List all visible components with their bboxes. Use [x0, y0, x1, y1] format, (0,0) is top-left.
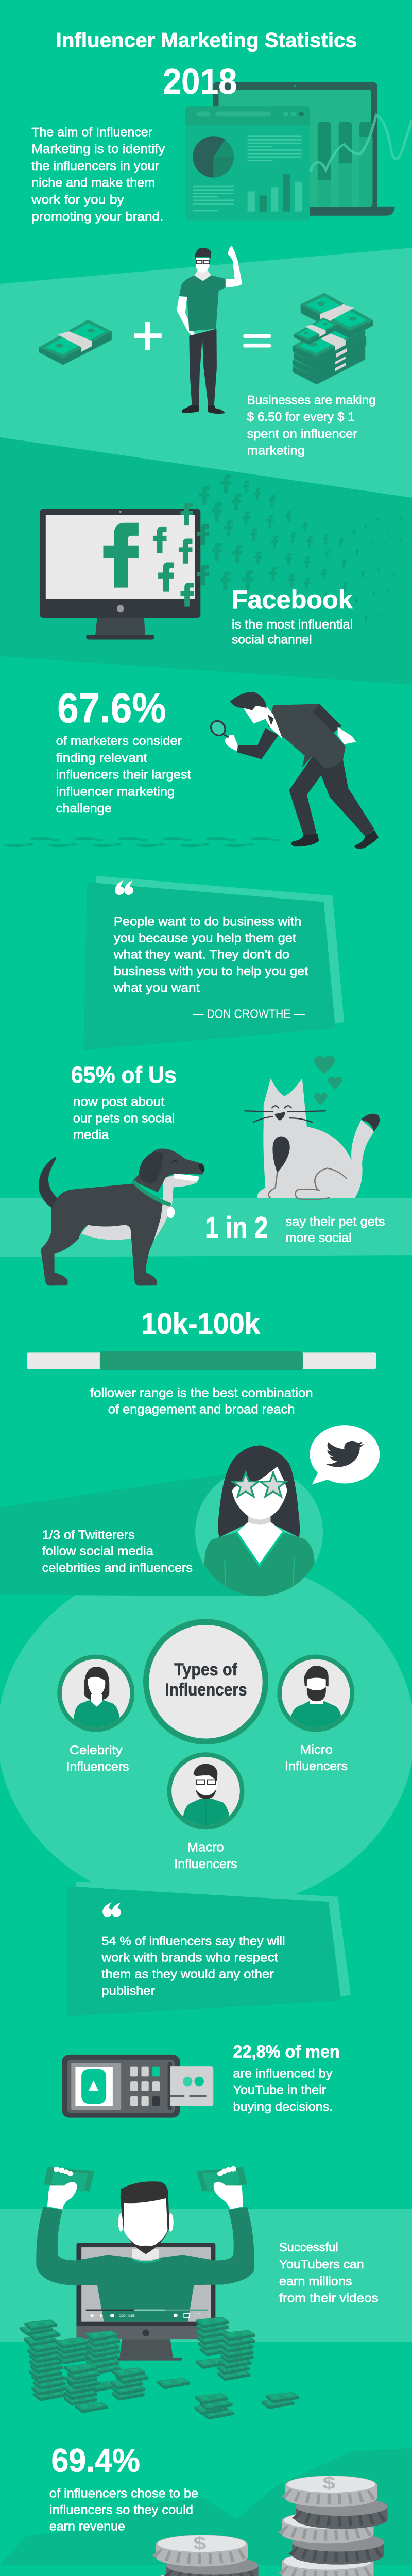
- year: 2018: [163, 61, 237, 102]
- intro text: The aim of Influencer: [31, 126, 152, 139]
- youtuber text: from their videos: [279, 2292, 379, 2305]
- twitter text: [42, 1529, 193, 1574]
- section: quote and youtube: [62, 1841, 351, 2118]
- pets band text: [286, 1215, 385, 1245]
- quote text: work with brands who respect: [101, 1951, 278, 1964]
- follower range text: [90, 1386, 313, 1416]
- revenue text: [49, 2487, 198, 2533]
- facebook heading: Facebook: [232, 586, 353, 614]
- illustration: card reader: [62, 2055, 213, 2118]
- illustration: man with raised hand: [177, 246, 242, 414]
- youtuber text: [279, 2241, 379, 2305]
- darker green diagonal band: [0, 437, 412, 685]
- label: celebrity influencers: Celebrity: [70, 1743, 123, 1757]
- pets horizontal band: [0, 1198, 412, 1257]
- icon: plus: [134, 322, 162, 350]
- label: macro influencers: [174, 1841, 237, 1871]
- avatar: micro influencer: [277, 1655, 354, 1732]
- illustration: woman with star glasses: [195, 1445, 323, 1603]
- panel: quote: [83, 876, 344, 1050]
- stat: 22,8% of men: 22,8% of men: [233, 2042, 340, 2061]
- stat: 10k-100k: 10k-100k: [141, 1308, 261, 1341]
- twitter text: 1/3 of Twitterers: [42, 1529, 135, 1542]
- pets text: [73, 1095, 175, 1142]
- label: macro influencers: Influencers: [174, 1857, 237, 1871]
- follower range text: of engagement and broad reach: [108, 1403, 295, 1416]
- label: micro influencers: Influencers: [285, 1760, 348, 1773]
- quote text: what you want: [113, 981, 200, 995]
- scattered facebook icons: [199, 474, 404, 625]
- businesses text: marketing: [247, 444, 305, 457]
- icon: money stack: [293, 293, 373, 384]
- illustration: coin stacks: [152, 2473, 388, 2576]
- intro text: niche and make them: [31, 176, 155, 190]
- youtuber text: earn millions: [279, 2275, 352, 2289]
- stat: 69.4%: 69.4%: [51, 2442, 140, 2479]
- illustration: monitor stand: [76, 2243, 215, 2361]
- label: micro influencers: Micro: [300, 1743, 333, 1757]
- quote text: publisher: [101, 1984, 155, 1997]
- label: micro influencers: [285, 1743, 348, 1773]
- youtuber text: YouTubers can: [279, 2258, 364, 2272]
- pets text: our pets on social: [73, 1112, 175, 1125]
- twitter text: follow social media: [42, 1545, 154, 1558]
- pets text: media: [73, 1128, 109, 1142]
- stat: 65% of us: 65% of Us: [71, 1062, 177, 1088]
- twitter text: celebrities and influencers: [42, 1561, 193, 1574]
- quote text: them as they would any other: [101, 1968, 274, 1981]
- stat text: finding relevant: [56, 752, 147, 765]
- section: intro: [31, 29, 412, 414]
- icon: quote mark: [115, 880, 133, 895]
- illustration: piles of cash: [20, 2317, 299, 2419]
- facebook text: is the most influential: [232, 618, 353, 632]
- avatar: macro influencer: [167, 1752, 244, 1831]
- video player controls: 0:00 \ 0:56: [119, 2313, 135, 2318]
- youtube text: are influenced by: [233, 2067, 332, 2080]
- section: detective and quote: [4, 692, 379, 1105]
- facebook text: social channel: [232, 633, 312, 647]
- pets text: now post about: [73, 1095, 164, 1109]
- panel: quote 54 percent: [67, 1882, 351, 2016]
- quote text: — DON CROWTHE —: [193, 1007, 305, 1021]
- stat text: influencers their largest: [56, 768, 191, 782]
- icon: quote mark: [102, 1902, 121, 1917]
- stat text: of marketers consider: [56, 734, 182, 748]
- quote text: you because you help them get: [114, 931, 296, 945]
- youtuber text: Successful: [279, 2241, 338, 2255]
- title: Influencer Marketing Statistics: [56, 29, 357, 52]
- businesses text: spent on influencer: [247, 428, 357, 441]
- stat text: influencer marketing: [56, 785, 175, 799]
- follower range text: follower range is the best combination: [90, 1386, 313, 1400]
- quote text: [113, 915, 308, 1021]
- section: youtuber: [0, 2166, 412, 2565]
- speech bubble with twitter bird: [310, 1425, 380, 1485]
- intro text: Marketing is to identify: [31, 142, 165, 156]
- light green diagonal band: [0, 248, 412, 498]
- illustration: cat: [244, 1078, 380, 1200]
- coins background hill: [0, 2448, 412, 2565]
- intro text: [31, 126, 165, 224]
- illustration: excited youtuber: [36, 2166, 254, 2322]
- businesses text: Businesses are making: [247, 394, 376, 407]
- footprints: [4, 837, 279, 847]
- section: facebook: [40, 394, 404, 732]
- intro text: promoting your brand.: [31, 210, 163, 224]
- stat text: [56, 734, 191, 816]
- avatar: celebrity influencer: [57, 1655, 134, 1732]
- youtubers horizontal band: [0, 2209, 412, 2342]
- center circle: types of influencers: [143, 1619, 268, 1744]
- youtube text: YouTube in their: [233, 2083, 327, 2097]
- youtube text: buying decisions.: [233, 2100, 333, 2113]
- illustration: dog: [39, 1148, 204, 1286]
- revenue text: earn revenue: [49, 2520, 125, 2533]
- revenue text: influencers so they could: [49, 2503, 193, 2517]
- intro text: the influencers in your: [31, 159, 160, 173]
- businesses text: $ 6.50 for every $ 1: [247, 410, 355, 424]
- quote text: [101, 1935, 285, 1997]
- illustration: detective with magnifier: [209, 692, 379, 849]
- businesses text: [247, 394, 376, 457]
- quote text: 54 % of influencers say they will: [101, 1935, 285, 1948]
- pets band text: more social: [286, 1231, 352, 1245]
- section: twitter and influencer types: [0, 1425, 380, 1831]
- pets band text: 1 in 2: 1 in 2: [205, 1211, 268, 1245]
- facebook text: [232, 618, 353, 647]
- quote text: People want to do business with: [114, 915, 301, 928]
- revenue text: of influencers chose to be: [49, 2487, 198, 2500]
- twitter background band: [0, 1473, 265, 1596]
- video player controls: [86, 2310, 208, 2318]
- pets band text: say their pet gets: [286, 1215, 385, 1229]
- icon: hearts: [314, 1056, 342, 1105]
- section: coins and news: [0, 2473, 412, 2576]
- center circle: types of influencers: Influencers: [165, 1680, 247, 1699]
- illustration: coin stacks: $: [193, 2533, 207, 2553]
- label: celebrity influencers: [66, 1743, 129, 1774]
- icon: money bundle: [39, 319, 112, 365]
- follower range bar: [27, 1351, 376, 1370]
- illustration: coin stacks: $: [322, 2473, 336, 2493]
- section: pets and follower range: [27, 1078, 385, 1416]
- label: macro influencers: Macro: [187, 1841, 224, 1854]
- illustration: laptop with dashboard: [185, 82, 412, 221]
- stat text: challenge: [56, 802, 112, 816]
- quote text: business with you to help you get: [114, 964, 308, 978]
- icon: equals: [243, 334, 271, 348]
- illustration: monitor with facebook icons: [40, 503, 209, 639]
- intro text: work for you by: [31, 193, 124, 207]
- youtube text: [233, 2067, 333, 2113]
- types of influencers background circle: [0, 1556, 412, 1911]
- center circle: types of influencers: Types of: [174, 1659, 237, 1679]
- stat: 67.6%: 67.6%: [57, 685, 166, 732]
- quote text: what they want. They don’t do: [113, 948, 289, 961]
- label: celebrity influencers: Influencers: [66, 1760, 129, 1774]
